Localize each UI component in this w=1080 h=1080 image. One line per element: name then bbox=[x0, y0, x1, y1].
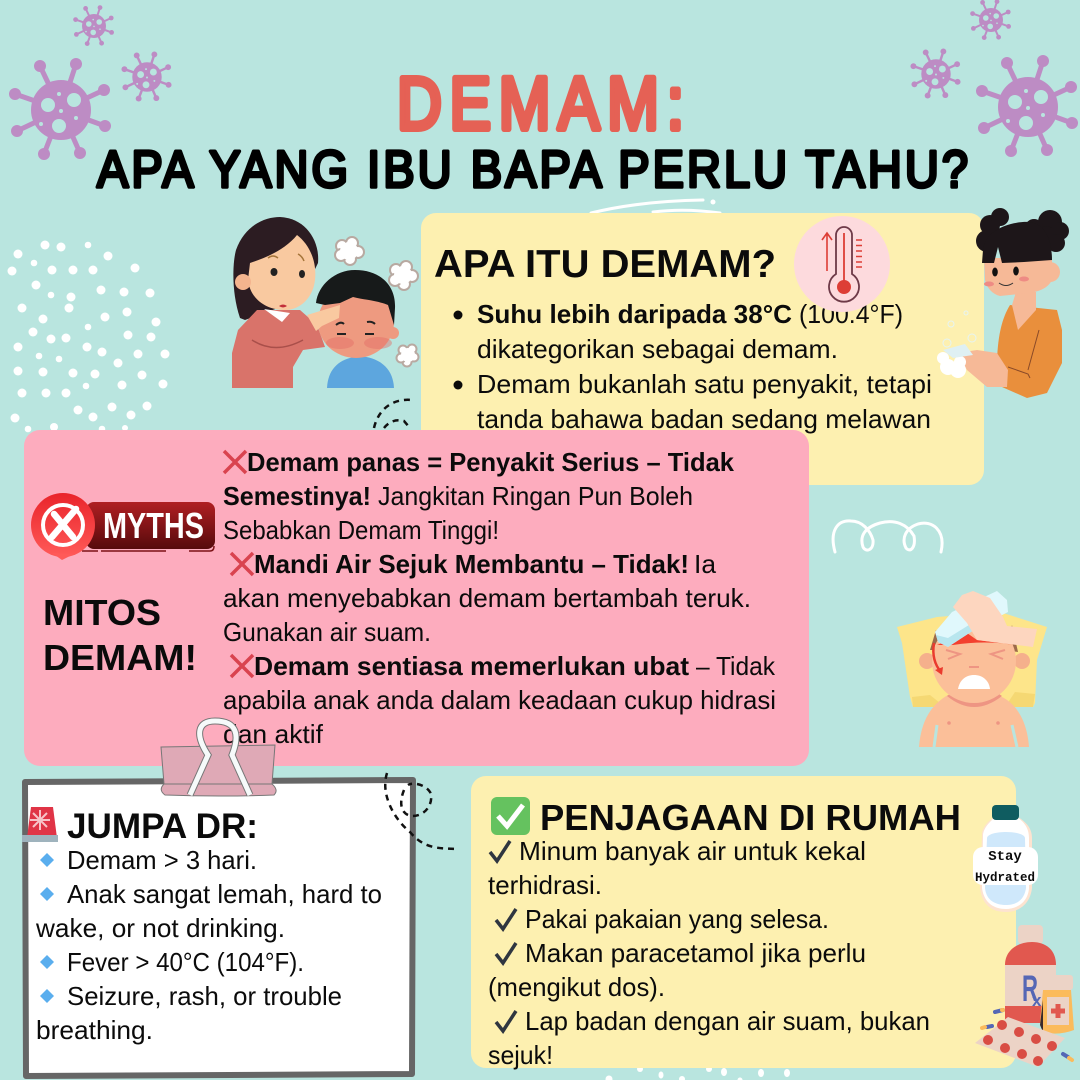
icon: stay hydrated bottle bbox=[973, 805, 1038, 912]
myth 1: Jangkitan Ringan Pun Boleh bbox=[378, 481, 693, 511]
virus icons left bbox=[9, 5, 172, 160]
mother body bbox=[232, 310, 325, 388]
badge: myths bbox=[31, 493, 215, 560]
flushed forehead bbox=[937, 633, 1015, 645]
hair cap bbox=[982, 222, 1052, 263]
myth 2: Gunakan air suam. bbox=[223, 617, 431, 647]
binder clip bbox=[161, 721, 276, 796]
panel: penjagaan di rumah bbox=[471, 776, 1016, 1070]
dashed spiral top bbox=[374, 400, 412, 428]
boy hair bbox=[316, 270, 395, 325]
warning signs list: breathing. bbox=[36, 1015, 153, 1045]
title: DEMAM: bbox=[397, 62, 684, 145]
badge: myths: MYTHS bbox=[103, 505, 204, 546]
baby body bbox=[919, 695, 1029, 747]
panel: jumpa dr bbox=[22, 780, 413, 1076]
illustration: sick baby with cold pack bbox=[897, 591, 1047, 747]
home care list: Lap badan dengan air suam, bukan bbox=[525, 1006, 930, 1036]
home care list: Pakai pakaian yang selesa. bbox=[525, 904, 829, 934]
icon: siren bbox=[22, 807, 58, 842]
home care list: Minum banyak air untuk kekal bbox=[519, 836, 866, 866]
heading: mitos demam: MITOS bbox=[43, 592, 161, 633]
myth 3: Demam sentiasa memerlukan ubat bbox=[254, 651, 689, 681]
heading: penjagaan di rumah: PENJAGAAN DI RUMAH bbox=[540, 797, 961, 838]
myth 1 bbox=[223, 447, 735, 545]
hand and arm bbox=[953, 591, 1037, 647]
hair buns bbox=[976, 208, 1069, 252]
fever arrow bbox=[933, 643, 943, 675]
pillow bbox=[897, 612, 1047, 707]
myth 2: akan menyebabkan demam bertambah teruk. bbox=[223, 583, 751, 613]
arm bbox=[957, 350, 1008, 387]
home care list: terhidrasi. bbox=[488, 870, 602, 900]
mother face bbox=[248, 235, 315, 310]
face and ear bbox=[1040, 262, 1060, 282]
mother hair bbox=[233, 217, 318, 320]
definition bullets bbox=[454, 299, 932, 434]
soap suds bbox=[937, 352, 966, 378]
virus icons right bbox=[910, 0, 1078, 157]
panel: mitos demam bbox=[24, 430, 809, 766]
icon: stay hydrated bottle: Hydrated bbox=[975, 870, 1035, 885]
orange bottle bbox=[1040, 990, 1074, 1034]
myth 3: dan aktif bbox=[223, 719, 324, 749]
steam puffs bbox=[335, 237, 418, 366]
definition bullets: Suhu lebih daripada 38°C bbox=[477, 299, 792, 329]
hair sides bbox=[930, 625, 1018, 652]
icon: medicine bottles and pills bbox=[975, 925, 1074, 1067]
title bbox=[97, 62, 968, 199]
home care list: (mengikut dos). bbox=[488, 972, 665, 1002]
bottom white dots bbox=[606, 1066, 790, 1080]
panel: apa itu demam bbox=[421, 213, 984, 485]
myth 2: Mandi Air Sejuk Membantu – Tidak! bbox=[254, 549, 689, 579]
heading: mitos demam: DEMAM! bbox=[43, 637, 197, 678]
definition bullets: Demam bukanlah satu penyakit, tetapi bbox=[477, 369, 932, 399]
decorative spiral bbox=[833, 521, 942, 552]
warning signs list bbox=[35, 845, 382, 1045]
icon: thermometer bbox=[794, 216, 890, 312]
neck bbox=[1012, 292, 1036, 330]
definition bullets: (100.4°F) bbox=[799, 299, 903, 329]
myth 2 bbox=[223, 549, 751, 647]
title: APA YANG IBU BAPA PERLU TAHU? bbox=[97, 141, 968, 199]
washed hand bbox=[943, 344, 973, 358]
heading: mitos demam bbox=[43, 592, 197, 678]
warning signs list: Demam > 3 hari. bbox=[67, 845, 257, 875]
myth 1: Sebabkan Demam Tinggi! bbox=[223, 515, 499, 545]
myth 3 bbox=[223, 651, 776, 749]
bubbles bbox=[943, 311, 976, 347]
warning signs list: Anak sangat lemah, hard to bbox=[67, 879, 382, 909]
icon: medicine bottles and pills: x bbox=[1032, 991, 1042, 1010]
dashed spiral bbox=[385, 773, 458, 849]
warning signs list: Seizure, rash, or trouble bbox=[67, 981, 342, 1011]
illustration: girl washing hands bbox=[937, 208, 1069, 398]
myth 3: – Tidak bbox=[696, 651, 776, 681]
cold pack bbox=[935, 591, 1008, 647]
boy head bbox=[318, 286, 394, 358]
home care list: Makan paracetamol jika perlu bbox=[525, 938, 866, 968]
icon: stay hydrated bottle: Stay bbox=[988, 849, 1022, 865]
myth 2: Ia bbox=[694, 549, 717, 579]
mouth and eyes bbox=[958, 675, 990, 689]
myth 1: Semestinya! bbox=[223, 481, 371, 511]
illustration: mother and sick son bbox=[232, 217, 418, 388]
home care list: sejuk! bbox=[488, 1040, 553, 1070]
ears bbox=[919, 653, 935, 669]
boy shirt bbox=[327, 356, 394, 388]
icon: check box bbox=[491, 797, 530, 835]
heading: apa itu demam: APA ITU DEMAM? bbox=[434, 243, 776, 286]
icon: medicine bottles and pills: R bbox=[1022, 968, 1038, 1009]
white dot pattern bbox=[8, 240, 170, 432]
head bbox=[932, 619, 1016, 703]
red bottle bbox=[1018, 925, 1043, 944]
myth 1: Demam panas = Penyakit Serius – Tidak bbox=[247, 447, 735, 477]
home care list bbox=[488, 836, 930, 1070]
decorative swoosh bbox=[591, 200, 720, 213]
loose pills bbox=[987, 1010, 1068, 1057]
warning signs list: Fever > 40°C (104°F). bbox=[67, 947, 304, 977]
cardigan bbox=[997, 305, 1062, 398]
myth 3: apabila anak anda dalam keadaan cukup hidrasi bbox=[223, 685, 776, 715]
blister pack bbox=[975, 1017, 1065, 1067]
mother hand bbox=[307, 305, 340, 331]
heading: jumpa dr: JUMPA DR: bbox=[67, 807, 258, 846]
definition bullets: tanda bahawa badan sedang melawan bbox=[477, 404, 931, 434]
definition bullets: dikategorikan sebagai demam. bbox=[477, 334, 838, 364]
warning signs list: wake, or not drinking. bbox=[35, 913, 285, 943]
